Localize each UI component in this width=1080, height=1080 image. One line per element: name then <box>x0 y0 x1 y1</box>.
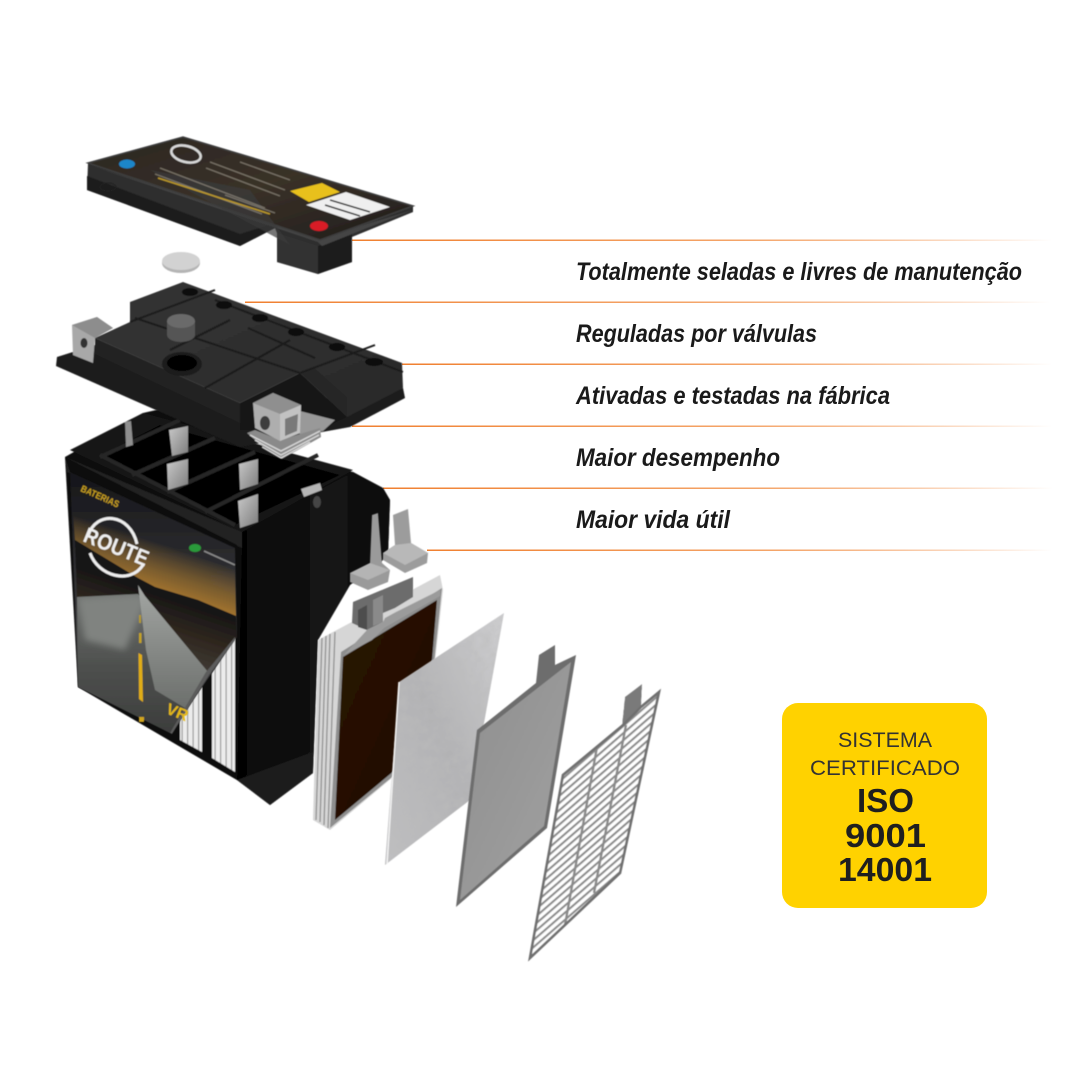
right terminal plate <box>296 410 335 436</box>
certification badge <box>782 703 987 908</box>
illustration: middle cover <box>56 282 405 459</box>
illustration: battery body <box>65 408 390 805</box>
illustration: grid plate <box>525 680 665 960</box>
illustration: textured separator <box>385 613 504 865</box>
label: valves: Reguladas por válvulas <box>576 320 817 348</box>
label: performance: Maior desempenho <box>576 444 780 472</box>
battery label artwork <box>70 472 237 734</box>
front rim <box>65 457 242 548</box>
illustration: top lid <box>87 137 413 274</box>
lug right <box>383 509 428 573</box>
label: sealed: Totalmente seladas e livres de manutenção <box>576 258 1022 286</box>
label: activated: Ativadas e testadas na fábrica <box>575 382 890 410</box>
illustration: grey plate <box>456 645 576 907</box>
open cells <box>70 413 353 532</box>
brand text: BATERIAS <box>79 484 121 510</box>
illustration: electrode pack <box>313 509 443 830</box>
illustration: coin disc <box>162 252 200 273</box>
feature labels <box>575 258 1022 534</box>
lead straps <box>352 577 413 630</box>
flag <box>189 544 201 552</box>
badge: certificado: CERTIFICADO <box>810 757 960 780</box>
right face <box>237 472 390 780</box>
callout leader lines <box>245 240 1053 551</box>
exposed plates <box>180 637 235 772</box>
right terminal cube <box>253 393 301 441</box>
logo: ROUTE <box>80 522 153 571</box>
left terminal <box>72 317 113 363</box>
badge: ISO: ISO <box>857 782 914 819</box>
badge: 9001: 9001 <box>845 817 926 854</box>
label: lifespan: Maior vida útil <box>576 506 731 534</box>
badge: sistema: SISTEMA <box>838 729 932 752</box>
lug left <box>350 513 390 590</box>
page: battery exploded view infographic <box>55 136 1041 962</box>
terminal washers <box>247 428 321 459</box>
badge: 14001: 14001 <box>838 851 932 888</box>
VR mark: VR <box>164 701 191 725</box>
